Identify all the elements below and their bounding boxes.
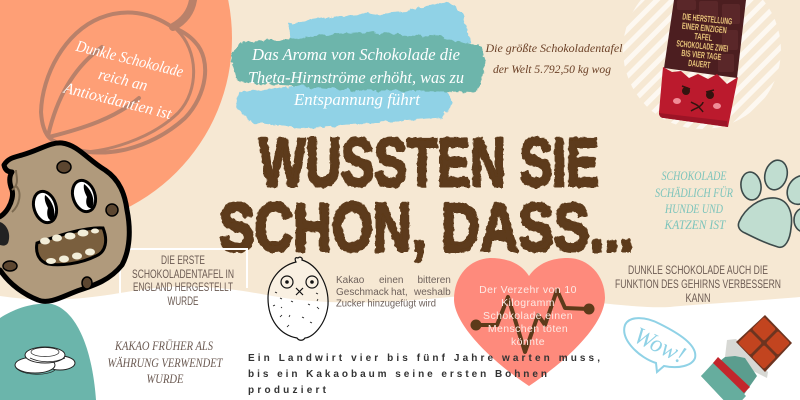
text: first bar: ENGLAND HERGESTELLT — [133, 280, 233, 294]
panel: teal corner — [0, 304, 96, 400]
text: antioxidants: Antioxidantien ist — [61, 80, 174, 123]
text: aroma — [248, 45, 464, 109]
text: aroma: Entspannung führt — [293, 90, 421, 109]
text: first bar: DIE ERSTE — [161, 253, 205, 267]
text: lethal dose: Der Verzehr von 10 — [479, 284, 577, 296]
title: WUSSTEN SIE — [259, 124, 599, 201]
icon: lemon face — [268, 257, 328, 340]
text: dogs and cats: SCHOKOLADE — [662, 168, 727, 183]
icon: paw — [738, 158, 800, 247]
text: bitter taste: Geschmack — [336, 287, 390, 298]
icon: wow speech bubble: Wow! — [630, 323, 689, 369]
text: first bar: SCHOKOLADENTAFEL IN — [132, 267, 234, 281]
icon: chocolate bar — [701, 315, 792, 400]
text: bitter taste: einen — [379, 275, 403, 286]
text: bitter taste: Zucker hinzugefügt wird — [336, 298, 436, 310]
text: bitter taste: hat, — [391, 287, 408, 298]
icon: chocolate bar character — [659, 0, 746, 127]
icon: cookie character — [0, 143, 129, 301]
text: antioxidants — [61, 38, 185, 123]
text: lethal dose — [479, 284, 577, 348]
text: production time: DAUERT — [688, 58, 711, 70]
striped circle — [623, 0, 781, 129]
cookie eyes — [30, 177, 99, 226]
text: currency: WURDE — [146, 371, 184, 386]
text: bitter taste: weshalb — [413, 287, 451, 298]
panel: brush banner — [230, 2, 486, 128]
text: production time: SCHOKOLADE ZWEI — [676, 38, 729, 54]
text: production time: TAFEL — [694, 31, 713, 43]
text: aroma: Theta-Hirnströme erhöht, was zu — [248, 68, 464, 87]
title: SCHON, DASS... — [219, 189, 634, 266]
text frame and first bar — [120, 249, 247, 308]
text: brain function — [615, 263, 781, 305]
text: farmer — [248, 353, 600, 396]
text: currency: KAKAO FRÜHER ALS — [114, 338, 213, 353]
text: farmer: produziert — [248, 385, 327, 396]
text: farmer: bis ein Kakaobaum seine ersten Bohnen — [248, 369, 547, 380]
icon: heartbeat line — [470, 290, 594, 352]
text: lethal dose: Schokolade einen — [483, 310, 573, 322]
text: lethal dose: Kilogramm — [501, 297, 555, 309]
icon: coins — [15, 347, 75, 374]
cookie bite — [0, 222, 9, 246]
text: antioxidants: Dunkle Schokolade — [73, 38, 185, 81]
text: currency: WÄHRUNG VERWENDET — [108, 355, 223, 370]
panel: orange circle — [0, 0, 232, 228]
text: largest bar — [485, 41, 623, 76]
text: aroma: Das Aroma von Schokolade die — [251, 45, 460, 64]
text: farmer: Ein Landwirt vier bis fünf Jahre warten muss, — [248, 353, 600, 364]
text: largest bar: Die größte Schokoladentafel — [485, 41, 623, 55]
text: brain function: KANN — [686, 291, 710, 305]
text: dogs and cats: KATZEN IST — [664, 217, 726, 232]
cookie mouth — [37, 228, 106, 265]
white wave — [0, 286, 800, 400]
text: currency — [108, 338, 223, 386]
title — [219, 124, 634, 266]
text: bitter taste — [336, 275, 451, 310]
text: production time: BIS VIER TAGE — [681, 48, 722, 62]
text: production time: DIE HERSTELLUNG — [682, 11, 733, 27]
text: largest bar: der Welt 5.792,50 kg wog — [493, 62, 611, 76]
text: antioxidants: reich an — [97, 66, 149, 95]
text: lethal dose: könnte — [511, 336, 545, 348]
text: lethal dose: Menschen töten — [488, 323, 568, 335]
panel: heart — [454, 258, 605, 386]
text: dogs and cats: SCHÄDLICH FÜR — [655, 185, 733, 200]
icon: leaf — [41, 0, 205, 153]
text: first bar — [132, 253, 234, 308]
text: bitter taste: Kakao — [336, 275, 365, 286]
text: bitter taste: bitteren — [418, 275, 451, 286]
text: first bar: WURDE — [168, 294, 198, 308]
text: production time: EINER EINZIGEN — [681, 21, 727, 35]
text: production time — [676, 11, 733, 70]
text: dogs and cats: HUNDE UND — [664, 201, 723, 216]
text: dogs and cats — [655, 168, 733, 232]
